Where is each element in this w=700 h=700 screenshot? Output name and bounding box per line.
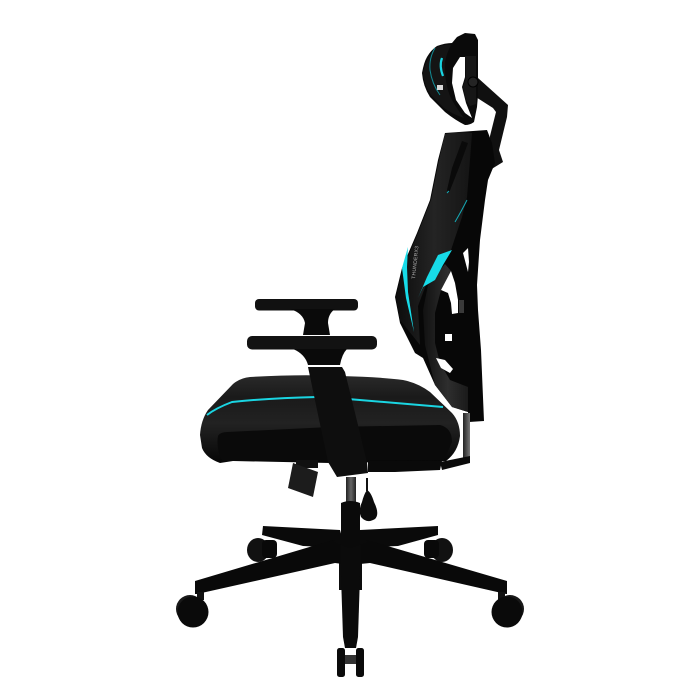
- star base: [195, 501, 507, 648]
- lower frame arc: [423, 264, 468, 412]
- gas column: [346, 477, 356, 505]
- mechanism openings: [436, 248, 469, 373]
- rear armrest: [255, 299, 358, 335]
- headrest support arm: [468, 78, 508, 170]
- teal seat piping: [207, 397, 443, 415]
- tilt knob: [288, 460, 318, 497]
- mechanism detail: [459, 300, 464, 313]
- left teal stripe: [402, 247, 414, 332]
- arm pivot: [468, 77, 478, 87]
- front-left arm: [195, 540, 350, 594]
- headrest: [422, 33, 508, 170]
- seat bracket: [440, 413, 470, 470]
- headrest teal accent: [441, 58, 443, 76]
- rear centre block: [339, 563, 362, 590]
- front casters: [176, 592, 524, 677]
- mesh back panel: [396, 132, 472, 345]
- backrest: [395, 130, 495, 422]
- arm upright: [308, 367, 368, 477]
- vertical brand text: THUNDERX3: [411, 245, 420, 279]
- right teal stripe: [418, 250, 452, 298]
- headrest teal piping: [430, 48, 440, 95]
- upper accent flap: [447, 141, 468, 193]
- rear base arms: [262, 526, 345, 548]
- front arm: [340, 545, 361, 648]
- thin teal piping: [447, 191, 467, 222]
- headrest opening: [452, 57, 472, 118]
- under-seat plate: [368, 461, 442, 472]
- front-right arm: [350, 540, 507, 594]
- cushion padded side: [423, 45, 464, 118]
- rear casters: [247, 538, 453, 562]
- front armrest: [247, 336, 377, 365]
- height lever: [360, 478, 377, 521]
- base hub: [333, 501, 368, 548]
- headrest label tag: [437, 85, 443, 90]
- headrest frame and cushion: [422, 33, 478, 125]
- seat cushion: [200, 375, 460, 463]
- headrest bracket: [463, 56, 476, 106]
- front seat panel: [218, 425, 452, 461]
- back silhouette: [395, 130, 495, 422]
